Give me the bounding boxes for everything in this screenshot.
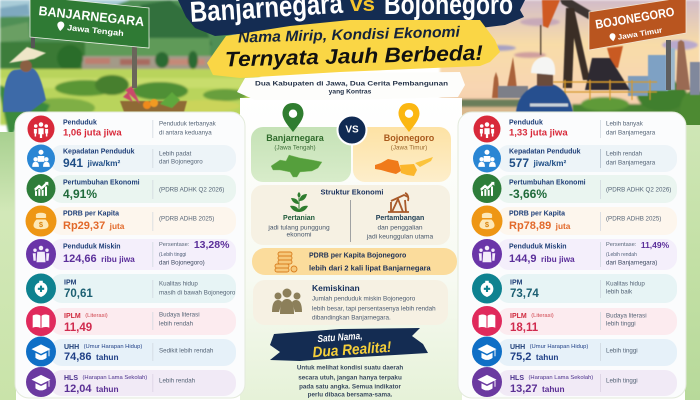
- row: IPM: 73,74: [510, 288, 539, 300]
- row: Pertumbuhan Ekonomi: Pertumbuhan Ekonomi: [63, 180, 140, 186]
- row: Penduduk Miskin: Persentase: 11,49%: [606, 236, 670, 254]
- row: IPLM Literasi: lebih tinggi: [606, 320, 636, 328]
- row: IPLM Literasi: IPLM (Literasi): [510, 308, 554, 324]
- row: Penduduk Miskin: 124,66 ribu jiwa: [63, 250, 135, 268]
- row: Pertumbuhan Ekonomi: 4,91%: [63, 187, 97, 201]
- row: Pertumbuhan Ekonomi: -3,66%: [509, 187, 547, 201]
- card: kemiskinan: [253, 280, 448, 325]
- white subtitle brush: [237, 72, 465, 100]
- side background right: [685, 125, 700, 400]
- row: IPM: IPM: [510, 280, 523, 286]
- row: Penduduk: 1,06 juta jiwa: [63, 128, 122, 138]
- row: HLS: HLS (Harapan Lama Sekolah): [64, 370, 147, 386]
- icon: oil pump: [388, 193, 409, 212]
- card: kemiskinan: dibandingkan Banjarnegara.: [312, 314, 391, 322]
- banjarnegara road sign: Jawa Tengah: [67, 23, 124, 38]
- row: UHH: UHH (Umur Harapan Hidup): [510, 338, 588, 356]
- bojonegoro road sign: BOJONEGORO: [594, 5, 676, 32]
- center column background: [240, 98, 462, 400]
- row: IPLM Literasi: Budaya literasi: [606, 312, 647, 320]
- closing text: Untuk melihat kondisi suatu daerah: [297, 364, 403, 372]
- row: Penduduk: di antara keduanya: [159, 130, 212, 136]
- photo background: oil field sunset, Bojonegoro: [440, 0, 700, 134]
- card: Bojonegoro: (Jawa Timur): [391, 144, 427, 152]
- card: struktur ekonomi: ekonomi: [287, 232, 312, 238]
- row: Penduduk Miskin: Penduduk Miskin: [63, 244, 121, 250]
- row: HLS: [472, 367, 677, 398]
- row: IPLM Literasi: [26, 306, 236, 336]
- row: Penduduk Miskin: (Lebih tinggi: [159, 252, 186, 258]
- row: IPM: [472, 274, 677, 304]
- card: struktur ekonomi: Struktur Ekonomi: [321, 188, 383, 196]
- row: Penduduk: Penduduk terbanyak: [159, 120, 217, 128]
- row: Pertumbuhan Ekonomi: Pertumbuhan Ekonomi: [509, 180, 586, 186]
- row: Penduduk: [474, 116, 656, 142]
- row: Penduduk Miskin: [26, 236, 236, 270]
- card: Bojonegoro: [353, 103, 451, 182]
- refinery silhouettes: [492, 40, 700, 98]
- row: IPM: 70,61: [64, 288, 93, 300]
- row: HLS: Lebih rendah: [159, 378, 196, 384]
- vs badge: [338, 116, 366, 144]
- icon: location pin: [57, 21, 65, 31]
- row: Kepadatan Penduduk: dari Bojonegoro: [159, 158, 203, 166]
- card: Banjarnegara: (Jawa Tengah): [274, 144, 316, 152]
- row: Kepadatan Penduduk: 941 jiwa/km²: [63, 154, 120, 172]
- row: UHH: [472, 336, 677, 366]
- oil pump jack: [540, 0, 657, 100]
- row: IPLM Literasi: IPLM (Literasi): [64, 308, 108, 324]
- icon: green map pin: [282, 103, 304, 132]
- banner: Satu Nama, Dua Realita: Dua Realita!: [312, 339, 392, 361]
- card: struktur ekonomi: Pertanian: [283, 215, 315, 222]
- row: Penduduk Miskin: dari Bojonegoro): [159, 260, 205, 266]
- map: Banjarnegara: [271, 155, 322, 177]
- yellow subtitle brush: Ternyata Jauh Berbeda!: [225, 42, 483, 71]
- vs badge: VS: [345, 124, 359, 136]
- row: Penduduk Miskin: 144,9 ribu jiwa: [509, 250, 575, 268]
- row: PDRB per Kapita: Rp78,89 juta: [509, 218, 571, 234]
- row: Pertumbuhan Ekonomi: [472, 174, 677, 203]
- row: Penduduk Miskin: [472, 236, 677, 270]
- icon: yellow map pin: [398, 103, 420, 132]
- card: struktur ekonomi: [251, 185, 450, 245]
- row: PDRB per Kapita: [26, 206, 236, 236]
- row: IPM: [26, 274, 236, 304]
- row: HLS: [26, 367, 236, 398]
- icon: location pin: [609, 33, 616, 42]
- banjarnegara road sign: BANJARNEGARA: [38, 3, 145, 29]
- row: Penduduk: Penduduk: [63, 120, 97, 126]
- vegetable basket: [120, 86, 187, 112]
- closing text: perlu dibaca bersama-sama.: [308, 392, 393, 398]
- card: struktur ekonomi: jadi tulang punggung: [267, 224, 330, 232]
- banner: Satu Nama, Dua Realita: Satu Nama,: [317, 331, 363, 345]
- row: Penduduk Miskin: Persentase: 13,28%: [159, 236, 230, 254]
- row: Penduduk: Lebih banyak: [606, 120, 644, 128]
- row: PDRB per Kapita: (PDRB ADHB 2025): [606, 216, 661, 222]
- card: struktur ekonomi: jadi keunggulan utama: [366, 234, 434, 240]
- row: IPLM Literasi: Budaya literasi: [159, 312, 200, 318]
- row: IPLM Literasi: 18,11: [510, 322, 539, 334]
- row: PDRB per Kapita: [472, 206, 677, 236]
- row: Penduduk: [28, 116, 217, 142]
- panel: Bojonegoro indicators: [458, 112, 686, 398]
- row: Penduduk: Penduduk: [509, 120, 543, 126]
- row: Penduduk: 1,33 juta jiwa: [509, 128, 568, 138]
- row: IPM: IPM: [64, 280, 77, 286]
- card: struktur ekonomi: Pertambangan: [376, 215, 424, 222]
- row: Kepadatan Penduduk: Kepadatan Penduduk: [63, 148, 135, 156]
- row: UHH: 75,2 tahun: [510, 348, 558, 366]
- row: Pertumbuhan Ekonomi: [26, 174, 236, 203]
- row: PDRB per Kapita: Rp29,37 juta: [63, 218, 125, 234]
- row: Kepadatan Penduduk: 577 jiwa/km²: [509, 154, 566, 172]
- row: HLS: 13,27 tahun: [510, 380, 565, 398]
- row: Pertumbuhan Ekonomi: (PDRB ADHK Q2 2026): [606, 186, 671, 194]
- icon: coins: [275, 252, 297, 272]
- panel: Banjarnegara indicators: [15, 112, 245, 398]
- yellow subtitle brush: Nama Mirip, Kondisi Ekonomi: [238, 24, 461, 46]
- row: PDRB per Kapita: PDRB per Kapita: [509, 210, 565, 218]
- white subtitle brush: yang Kontras: [329, 88, 372, 96]
- white subtitle brush: Dua Kabupaten di Jawa, Dua Cerita Pembangunan: [255, 80, 448, 88]
- row: Penduduk Miskin: Penduduk Miskin: [509, 244, 567, 250]
- row: Penduduk Miskin: dari Banjarnegara): [606, 260, 657, 266]
- bojonegoro road sign: Jawa Timur: [617, 25, 663, 42]
- row: IPM: Kualitas hidup: [606, 280, 645, 288]
- photo background: rice fields, Banjarnegara: [0, 0, 260, 140]
- row: IPM: lebih baik: [606, 288, 633, 296]
- card: kemiskinan: Jumlah penduduk miskin Bojonegoro: [312, 296, 416, 302]
- callout: PDRB per kapita: PDRB per Kapita Bojonegoro: [309, 252, 406, 260]
- callout: PDRB per kapita: lebih dari 2 kali lipat Banjarnegara: [309, 264, 432, 272]
- row: IPLM Literasi: [472, 306, 677, 336]
- card: Banjarnegara: [251, 103, 351, 182]
- closing text: [297, 364, 403, 398]
- row: HLS: Lebih tinggi: [606, 378, 638, 384]
- card: Bojonegoro: Bojonegoro: [384, 133, 435, 143]
- card: Banjarnegara: Banjarnegara: [266, 133, 325, 143]
- row: HLS: 12,04 tahun: [64, 380, 119, 398]
- row: HLS: HLS (Harapan Lama Sekolah): [510, 370, 593, 386]
- row: UHH: [26, 336, 236, 366]
- closing text: secara utuh, jangan hanya terpaku: [298, 374, 402, 382]
- row: PDRB per Kapita: PDRB per Kapita: [63, 210, 119, 218]
- card: struktur ekonomi: dan penggalian: [377, 224, 423, 232]
- yellow subtitle brush: [207, 20, 500, 78]
- row: UHH: 74,86 tahun: [64, 348, 119, 366]
- row: Kepadatan Penduduk: Kepadatan Penduduk: [509, 148, 581, 156]
- row: PDRB per Kapita: (PDRB ADHB 2025): [159, 216, 214, 222]
- bojonegoro road sign: [589, 0, 686, 90]
- row: Kepadatan Penduduk: Lebih padat: [159, 150, 192, 158]
- icon: people: [272, 288, 302, 314]
- row: Pertumbuhan Ekonomi: (PDRB ADHK Q2 2026): [159, 186, 224, 194]
- row: IPM: masih di bawah Bojonegoro: [159, 290, 236, 296]
- banner: Satu Nama, Dua Realita: [270, 328, 428, 361]
- row: Penduduk: dari Banjarnegara: [606, 130, 656, 136]
- map: Bojonegoro: [375, 159, 401, 174]
- row: Penduduk Miskin: (Lebih rendah: [606, 252, 637, 258]
- card: kemiskinan: Kemiskinan: [312, 283, 360, 293]
- farmer: [3, 47, 46, 112]
- card: kemiskinan: lebih besar, tapi persentasenya lebih rendah: [312, 306, 436, 312]
- worker: [516, 57, 573, 112]
- row: Kepadatan Penduduk: [473, 144, 677, 172]
- row: UHH: Sedikit lebih rendah: [159, 348, 214, 354]
- callout: PDRB per kapita: [252, 248, 457, 275]
- row: IPLM Literasi: lebih rendah: [159, 320, 194, 328]
- closing text: pada satu angka. Semua indikator: [299, 384, 401, 390]
- side background left: [0, 132, 16, 400]
- title banner: [178, 0, 525, 36]
- banjarnegara road sign: [30, 0, 149, 88]
- row: IPM: Kualitas hidup: [159, 280, 198, 288]
- row: IPLM Literasi: 11,49: [64, 322, 92, 334]
- row: UHH: Lebih tinggi: [606, 348, 638, 354]
- row: Kepadatan Penduduk: dari Banjarnegara: [606, 160, 656, 166]
- row: Kepadatan Penduduk: Lebih rendah: [606, 150, 643, 158]
- icon: plant: [290, 192, 308, 212]
- row: Kepadatan Penduduk: [27, 144, 236, 172]
- row: UHH: UHH (Umur Harapan Hidup): [64, 338, 142, 356]
